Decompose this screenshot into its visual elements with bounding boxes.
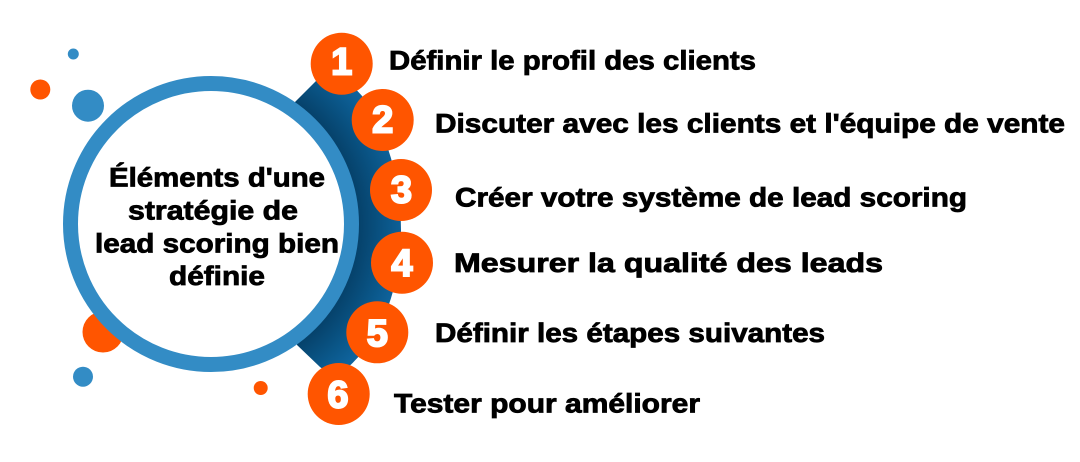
step 3 badge: 3 [391,170,412,212]
step 4 label: Mesurer la qualité des leads [454,248,883,278]
step 1 badge [311,33,373,95]
decorative dot: small blue top [68,48,79,60]
dark blue curved band [295,80,401,378]
step 6 badge: 6 [327,374,349,416]
step 3 badge [370,159,432,221]
decorative dot: large blue top [72,90,104,122]
central title: définie [169,261,265,291]
step 1 label: Définir le profil des clients [389,46,756,76]
decorative dot: blue bottom [73,367,93,387]
step 6 badge [308,363,370,425]
step 1 badge: 1 [331,42,352,84]
central ring with white circle [70,84,352,364]
central title: stratégie de [128,196,298,226]
decorative dot: orange left [30,80,50,100]
central title [95,162,339,291]
step 3 label: Créer votre système de lead scoring [455,182,967,212]
step 2 label: Discuter avec les clients et l'équipe de vente [435,108,1065,138]
central title: Éléments d'une [109,162,325,192]
decorative dot: small orange bottom [254,381,268,395]
step 2 badge: 2 [372,100,393,142]
decorative dot: large orange bottom [82,312,124,352]
step 4 badge: 4 [391,243,413,285]
step 4 badge [371,232,433,294]
step 5 label: Définir les étapes suivantes [435,318,825,348]
step 6 label: Tester pour améliorer [394,388,701,418]
step 2 badge [352,89,414,151]
step 5 badge: 5 [367,313,388,355]
central title: lead scoring bien [95,228,339,258]
step 5 badge [346,301,408,363]
